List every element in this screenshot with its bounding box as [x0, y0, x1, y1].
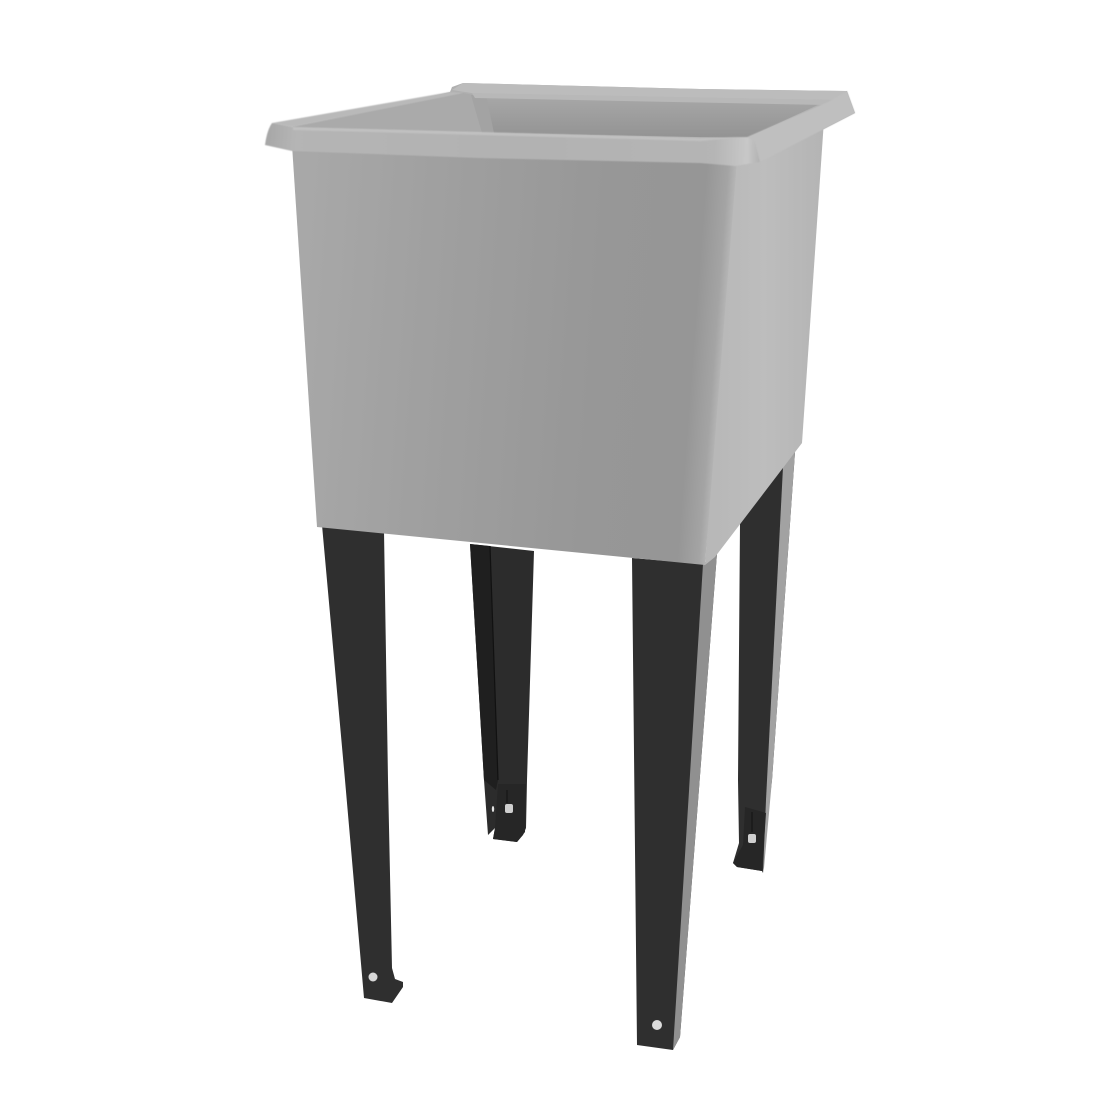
right leg	[733, 452, 795, 873]
sink basin body	[292, 120, 824, 565]
back leg	[470, 544, 534, 842]
screw: left leg	[368, 972, 378, 982]
side face	[705, 120, 824, 565]
rim: front lip	[265, 123, 760, 166]
screw: back leg	[505, 804, 513, 813]
screw: right leg	[748, 834, 756, 843]
front leg	[632, 553, 717, 1050]
front face	[292, 145, 737, 565]
rim: right side	[747, 91, 855, 162]
interior back wall	[475, 95, 822, 138]
interior left wall	[293, 93, 490, 133]
left leg	[322, 525, 403, 1003]
rim: left top	[272, 92, 463, 127]
sink back rim and interior	[293, 83, 855, 162]
sink rim	[265, 91, 855, 166]
screw: front leg	[652, 1020, 662, 1030]
